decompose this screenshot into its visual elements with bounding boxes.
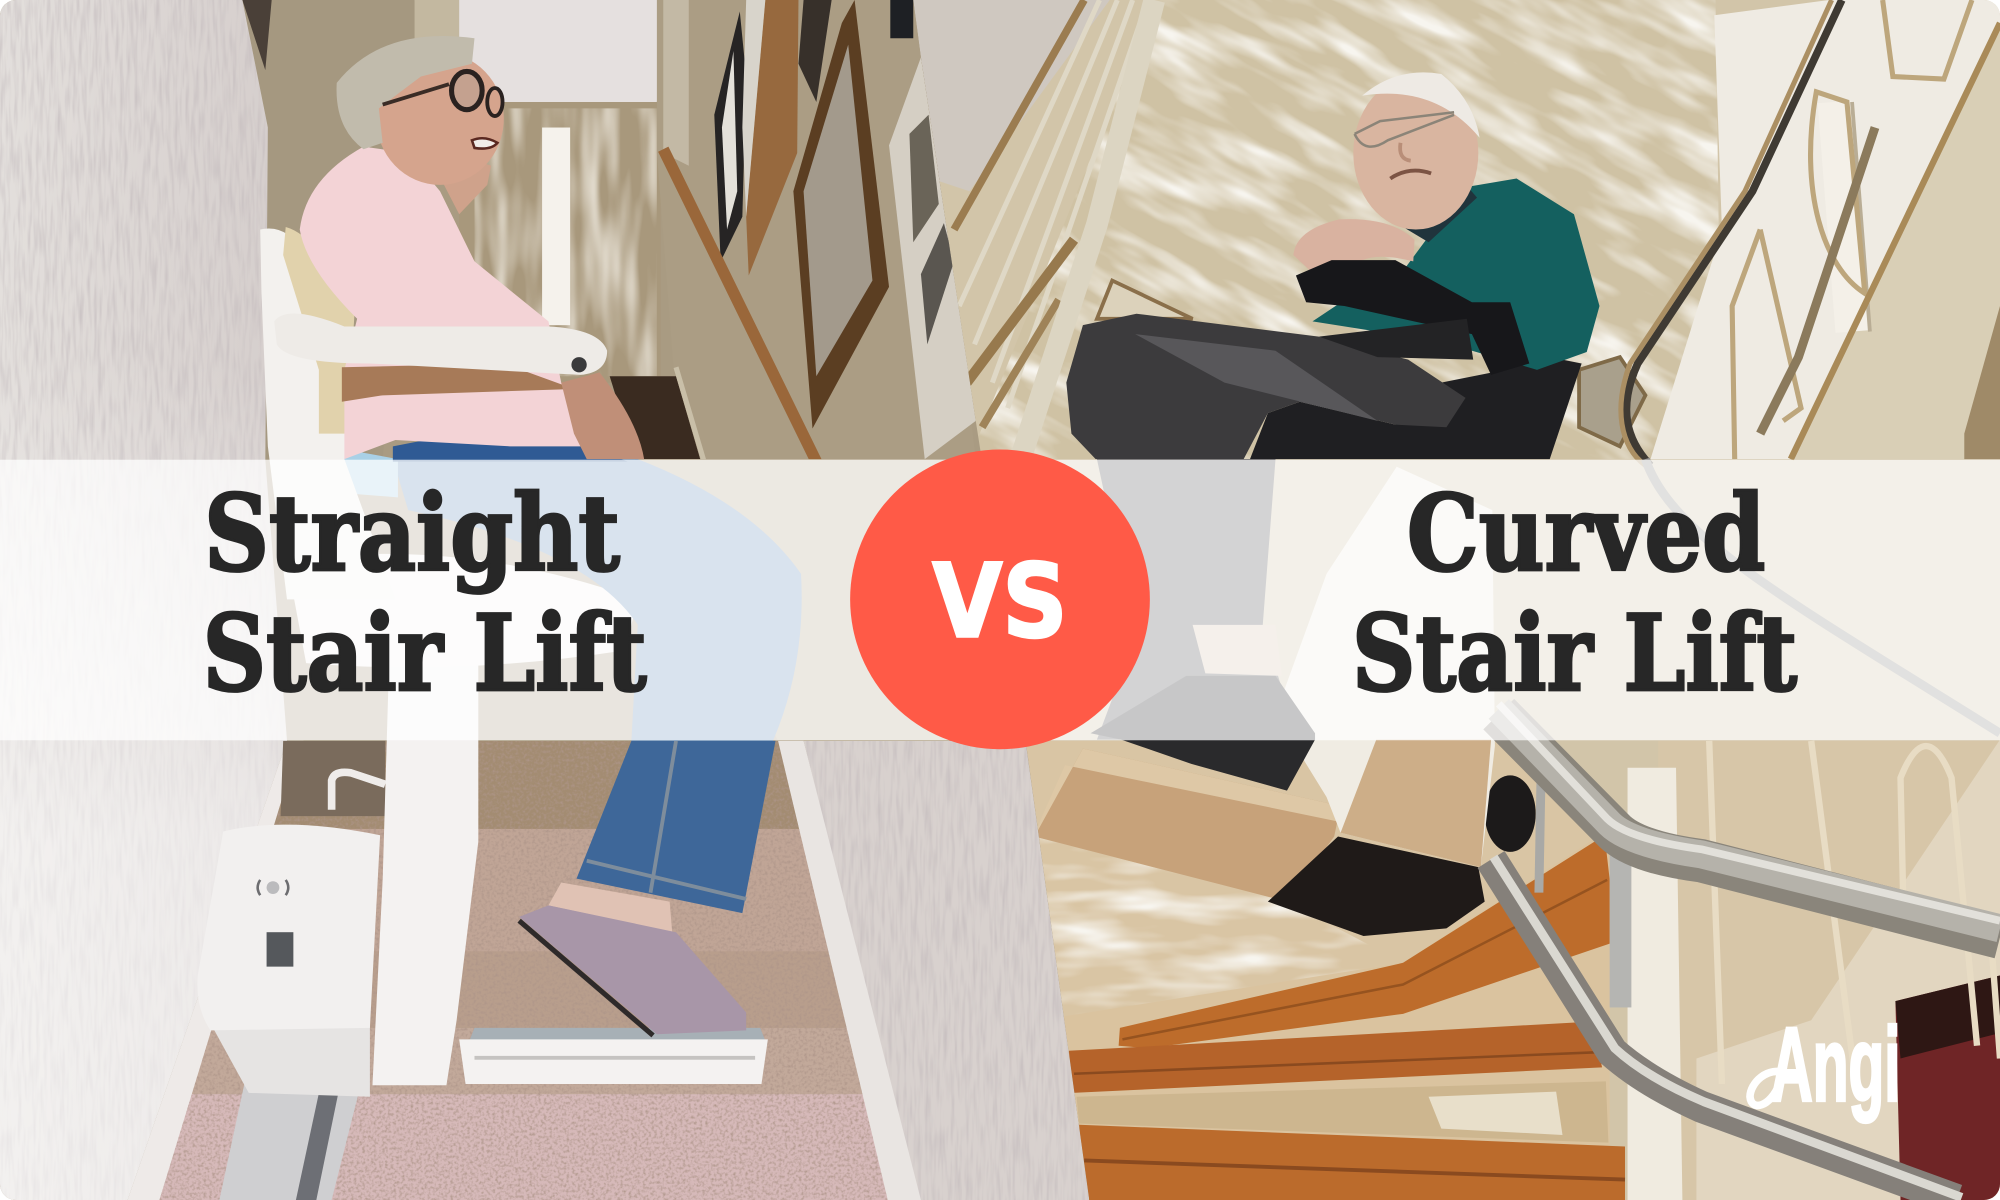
far stairs: [610, 376, 700, 459]
ornamental balusters: [1732, 0, 1972, 459]
man's hands: [1293, 219, 1415, 274]
heading: curved stair lift: [1352, 472, 1797, 715]
jeans lower leg: [577, 741, 776, 913]
white stair wall and beige wall, upper right: [1651, 0, 2000, 459]
curved rail through band: [1645, 459, 2000, 733]
control armrest: [1296, 260, 1529, 375]
woman's hands: [561, 372, 644, 459]
curved track rail: [1626, 0, 1842, 465]
picture on left wall: [242, 0, 272, 70]
skirting: [676, 367, 704, 462]
woman's head: [337, 36, 504, 185]
armrest: [274, 314, 607, 375]
motor: [1268, 837, 1485, 936]
small dark frame: [798, 0, 832, 102]
lower right wall: [1658, 741, 2000, 1200]
banister balusters: [954, 0, 1148, 427]
heading: curved stair lift: Stair Lift: [1352, 592, 1797, 715]
man's sweater: [1312, 179, 1599, 370]
man's trouser lower leg: [1097, 459, 1315, 740]
heading: straight stair lift: [203, 472, 647, 715]
ceiling and upper-left wall: [893, 0, 1110, 191]
translucent title band: [0, 460, 2000, 740]
window and curtains: [474, 108, 657, 376]
seat frame: [260, 228, 395, 599]
stainless rail upper: [1499, 704, 2000, 937]
footrest: [459, 1028, 768, 1084]
carriage shroud: [213, 1020, 370, 1097]
stair post lower: [1628, 768, 1682, 1200]
right textured wall: [791, 741, 1097, 1200]
heading: straight stair lift: Stair Lift: [203, 592, 647, 715]
bracket: [1610, 848, 1631, 1007]
chair base: [1250, 357, 1582, 459]
handrail: [658, 146, 822, 460]
upper back wall: [242, 0, 415, 459]
shoe: [1091, 676, 1315, 791]
heading: straight stair lift: Straight: [204, 472, 620, 595]
logo: Angi: [1750, 1007, 1901, 1124]
seat belt: [1319, 319, 1473, 360]
lower rail nook: [281, 741, 385, 816]
slipper: [519, 905, 746, 1034]
column: [372, 663, 478, 1085]
left skirting: [128, 741, 304, 1200]
lower plaster wall: [1039, 838, 1368, 1014]
photo: straight stair lift: [0, 0, 1097, 1200]
bracket plate: [1534, 752, 1546, 893]
staircase: [1064, 829, 1625, 1200]
track: [220, 1084, 358, 1200]
pale frame: [889, 57, 976, 459]
side wall: [657, 0, 976, 459]
collar: [1403, 189, 1477, 242]
woman's sweater: [300, 147, 582, 459]
seat side panel: [314, 444, 398, 497]
footrest: [1034, 749, 1341, 902]
ceiling: [459, 0, 657, 102]
ankle: [548, 882, 672, 932]
vs badge: [850, 450, 1150, 749]
left textured wall: [0, 0, 287, 1200]
jeans thigh: [393, 459, 802, 741]
heading: curved stair lift: Curved: [1407, 472, 1765, 595]
vs badge: VS: [932, 542, 1068, 661]
sock: [1193, 625, 1282, 676]
carpet: [128, 741, 918, 1200]
right skirting: [776, 741, 921, 1200]
wood-framed picture: [746, 0, 798, 275]
logo: Angi: Angi: [1770, 1007, 1901, 1124]
tall mirror frame: [714, 11, 746, 261]
lower wall behind leg: [638, 459, 950, 741]
control box: [197, 825, 380, 1030]
folding handle: [332, 772, 385, 810]
armrest knob: [571, 357, 587, 372]
man's trousers: [1066, 314, 1466, 459]
banister post: [1020, 0, 1154, 459]
small black frame: [890, 0, 913, 38]
dark red doorway: [1895, 976, 2000, 1200]
stair post: [1834, 102, 1852, 332]
large picture frame: [793, 0, 889, 428]
lower balusters: [1709, 741, 2000, 1084]
seat back pad: [283, 227, 355, 434]
wall picture frames: [1097, 281, 1645, 446]
man's head: [1353, 72, 1480, 230]
chair carriage: [1276, 467, 1495, 867]
wheel: [1485, 775, 1536, 852]
woman's neck: [421, 140, 491, 214]
stainless rail lower: [1491, 857, 1962, 1200]
woman's jeans top: [393, 431, 628, 462]
sweater shadow: [342, 363, 574, 402]
plaster wall: [980, 0, 1718, 459]
seat cushion: [287, 554, 638, 667]
